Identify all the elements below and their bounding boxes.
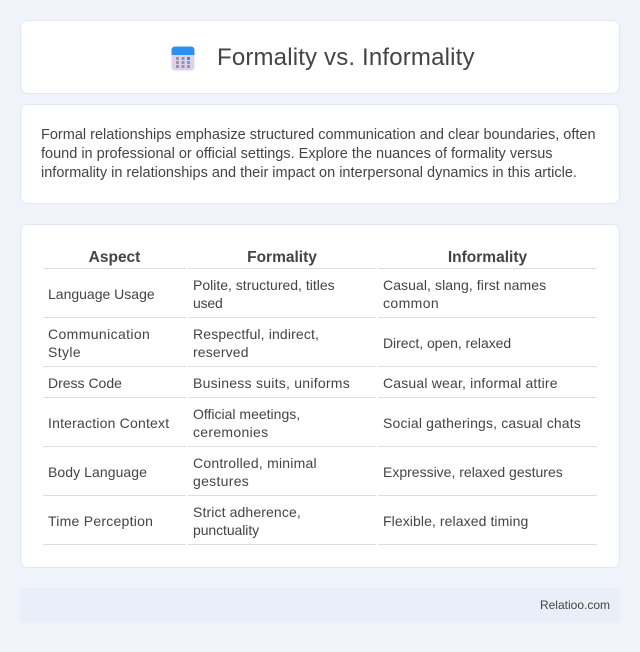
row: time perception: Flexible, relaxed timing — [383, 513, 528, 529]
table header — [89, 249, 527, 266]
intro text — [41, 127, 596, 181]
icon: calendar — [172, 46, 194, 70]
row: language usage: Casual, slang, first names — [383, 277, 546, 293]
row: communication style: Respectful, indirect, — [193, 326, 319, 342]
row: body language — [48, 455, 563, 489]
row: communication style: Direct, open, relaxed — [383, 335, 511, 351]
row: interaction context: Social gatherings, casual chats — [383, 415, 581, 431]
row: dress code: Casual wear, informal attire — [383, 375, 558, 391]
row: dress code: Business suits, uniforms — [193, 375, 350, 391]
row: language usage: Polite, structured, titles — [193, 277, 335, 293]
row: language usage: used — [193, 295, 223, 311]
row: interaction context: ceremonies — [193, 424, 268, 440]
row: dress code — [48, 375, 558, 391]
table header: Informality — [448, 249, 527, 266]
row: dress code: Dress Code — [48, 375, 122, 391]
title: Formality vs. Informality — [217, 44, 475, 71]
row: language usage: Language Usage — [48, 286, 155, 302]
row: communication style: Communication — [48, 326, 150, 342]
intro text: Formal relationships emphasize structured communication and clear boundaries, often — [41, 127, 596, 143]
row: interaction context: Official meetings, — [193, 406, 300, 422]
table header: Aspect — [89, 249, 140, 266]
footer bar — [20, 588, 620, 622]
row: body language: Controlled, minimal — [193, 455, 317, 471]
intro text: found in professional or official settings. Explore the nuances of formality versus — [41, 146, 553, 162]
footer text: Relatioo.com — [540, 598, 610, 612]
row: body language: gestures — [193, 473, 249, 489]
panel: title card — [20, 20, 620, 94]
row: communication style — [48, 326, 511, 360]
row: body language: Body Language — [48, 464, 147, 480]
row: communication style: Style — [48, 344, 81, 360]
row: time perception — [48, 504, 528, 538]
row: time perception: Time Perception — [48, 513, 153, 529]
row: time perception: punctuality — [193, 522, 259, 538]
intro text: informality in relationships and their impact on interpersonal dynamics in this article. — [41, 165, 577, 181]
row: time perception: Strict adherence, — [193, 504, 301, 520]
panel: comparison table — [20, 224, 620, 568]
table header: Formality — [247, 249, 317, 266]
row: interaction context — [48, 406, 581, 440]
row: language usage: common — [383, 295, 439, 311]
row: communication style: reserved — [193, 344, 249, 360]
panel: introduction — [20, 104, 620, 204]
row: interaction context: Interaction Context — [48, 415, 169, 431]
row: body language: Expressive, relaxed gestures — [383, 464, 563, 480]
row: language usage — [48, 277, 546, 311]
